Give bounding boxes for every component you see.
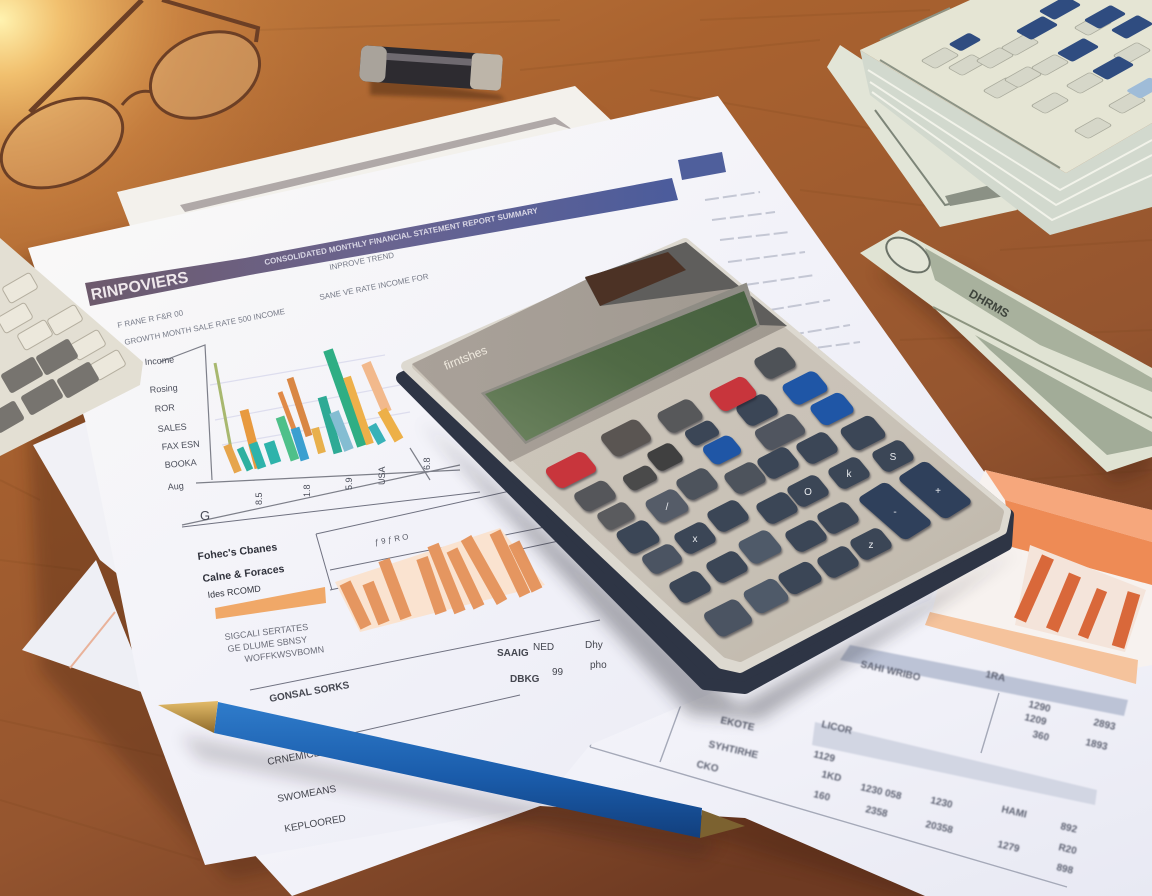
left calculator (0, 238, 143, 456)
bar chart: coloured bars: 5.9 (344, 477, 354, 490)
left sheet edge (33, 420, 150, 600)
main sheet of paper (28, 96, 990, 865)
table text: 1230 058 (859, 782, 903, 802)
table text: 2893 (1092, 717, 1117, 733)
text block left of second chart (197, 541, 285, 600)
keys: blue (700, 369, 856, 466)
bar chart: coloured bars: FAX ESN (161, 439, 200, 452)
keys: dark (571, 345, 973, 639)
figures column: DBKG (510, 674, 540, 685)
table text: 1230 (929, 795, 954, 811)
table bands (812, 645, 1128, 805)
lower-left sheet of paper (22, 560, 150, 695)
bar chart: coloured bars: USA (377, 466, 387, 485)
table text: 1KD (820, 769, 842, 784)
table text: SYHTIRHE (707, 739, 759, 761)
calculator on cash stack (860, 0, 1152, 173)
table text: 360 (1031, 729, 1050, 744)
lighter / flash drive (359, 45, 505, 100)
text block left of second chart: Ides RCOMD (207, 583, 262, 600)
table grid lines (590, 680, 1067, 887)
text lines: GROWTH MONTH SALE RATE 500 INCOME (124, 307, 286, 347)
small text block: WOFFKWSVBOMN (244, 644, 325, 664)
table text (695, 659, 1117, 877)
table text: 892 (1059, 821, 1078, 836)
orange bar chart (316, 520, 580, 632)
key legends: O (804, 487, 812, 498)
glasses (0, 0, 273, 206)
pen (158, 701, 745, 838)
figures column: SAAIG (497, 648, 529, 659)
table text: SAHI WRIBO (859, 659, 922, 684)
bar chart: coloured bars: 1.8 (302, 484, 312, 497)
figures column: KEPLOORED (284, 813, 347, 835)
text lines: F RANE R F&R 00 (117, 308, 184, 330)
text lines: SANE VE RATE INCOME FOR (319, 272, 430, 302)
orange report sheet (925, 470, 1152, 684)
table text: 1290 (1027, 699, 1052, 715)
keys: red (543, 375, 759, 490)
small tag (678, 152, 726, 180)
banknotes on the right (860, 230, 1152, 485)
text block left of second chart: Fohec's Cbanes (197, 541, 278, 563)
key legends: / (666, 502, 669, 513)
key legends: x (692, 534, 698, 545)
display bezel (585, 242, 787, 326)
key legends: - (893, 507, 897, 518)
main sheet of paper: CONSOLIDATED MONTHLY FINANCIAL STATEMENT REPORT SUMMARY (264, 206, 539, 267)
calculator shadow (420, 420, 1020, 720)
lower-right sheet with table (250, 560, 1152, 896)
table text: EKOTE (719, 715, 756, 734)
orange chart (1015, 545, 1146, 652)
figures column (267, 640, 607, 835)
wood shadow below pen (180, 735, 720, 860)
table text: R20 (1057, 842, 1078, 857)
cash stack (827, 45, 1152, 235)
small text block (224, 622, 325, 664)
small text block: GE DLUME SBNSY (227, 634, 308, 654)
orange bar chart: ƒ 9 ƒ R O (374, 532, 409, 547)
small text block: SIGCALI SERTATES (224, 622, 309, 642)
calculator (402, 242, 1020, 720)
right column lines (705, 192, 860, 350)
banknotes on the right: DHRMS (966, 286, 1012, 321)
figures column: CRNEMICE (267, 748, 321, 768)
table text: LICOR (820, 719, 854, 737)
bar chart: coloured bars: BOOKA (164, 457, 197, 470)
table text: 1129 (812, 749, 836, 765)
upper taupe panel (412, 244, 787, 462)
key legends: k (846, 469, 852, 480)
table text: 1893 (1084, 737, 1109, 753)
bar chart: coloured bars: SALES (157, 422, 187, 434)
heading band (85, 178, 678, 306)
heading text: RINPOVIERS (90, 269, 190, 304)
figures column: SWOMEANS (277, 784, 337, 805)
key legends: S (890, 452, 897, 463)
bar chart: coloured bars: Income (144, 354, 175, 367)
figures column: GONSAL SORKS (269, 680, 351, 705)
table text: 898 (1055, 862, 1074, 877)
red notes: YAY 0/26 (578, 700, 624, 720)
table text: 1209 (1023, 712, 1048, 728)
table text: 2358 (864, 804, 889, 820)
section divider (182, 480, 610, 745)
text lines (117, 251, 430, 347)
back sheet of paper (117, 86, 613, 226)
key legends (666, 452, 941, 551)
bar chart: coloured bars: G (200, 508, 210, 523)
screen (485, 291, 757, 441)
figures column: NED (533, 642, 554, 653)
bar chart: coloured bars: Rosing (149, 383, 178, 395)
orange highlight bar (215, 587, 326, 619)
figures column: pho (590, 660, 607, 671)
table text: 1RA (984, 669, 1006, 684)
key legends: z (868, 540, 874, 551)
bar chart: coloured bars: 6.8 (422, 457, 432, 470)
table text: 160 (812, 789, 831, 804)
key legends: + (935, 486, 941, 497)
figures column: Dhy (585, 640, 603, 651)
bar chart: coloured bars: ROR (154, 402, 176, 414)
casing (402, 245, 1008, 688)
text block left of second chart: Calne & Foraces (202, 563, 285, 585)
brand text: firntshes (442, 343, 489, 373)
table text: HAMI (1000, 804, 1028, 821)
bar chart: coloured bars: 8.5 (254, 492, 264, 505)
bar chart: coloured bars (144, 345, 460, 525)
table text: CKO (695, 759, 720, 775)
solar panel (585, 252, 686, 306)
table text: 20358 (924, 819, 954, 836)
table text: 1279 (996, 839, 1021, 855)
text lines: INPROVE TREND (329, 251, 395, 272)
bar chart: coloured bars: Aug (167, 481, 184, 492)
figures column: 99 (552, 667, 564, 678)
